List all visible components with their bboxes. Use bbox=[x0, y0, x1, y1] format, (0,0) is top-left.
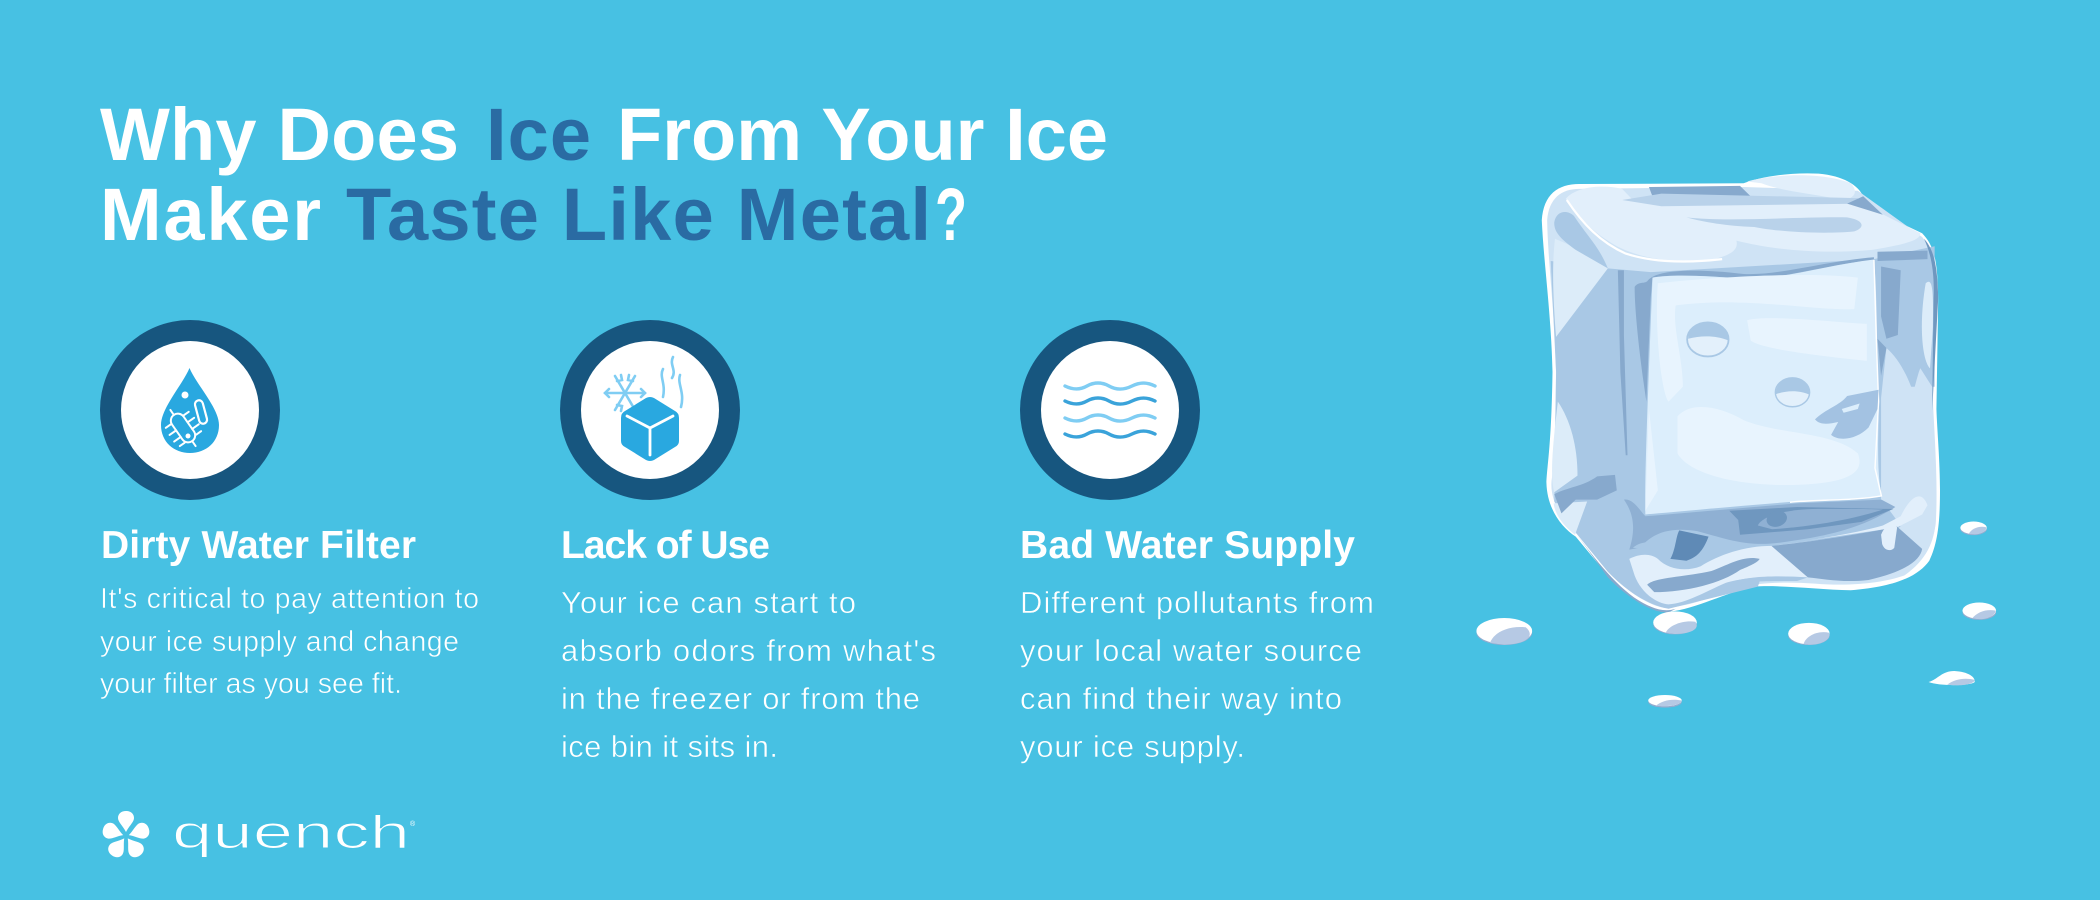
droplet 7 bbox=[1648, 695, 1682, 708]
text block: bad water supply bbox=[1020, 585, 1374, 764]
droplet 4 bbox=[1960, 521, 1987, 535]
title: Taste Like Metal bbox=[346, 173, 931, 256]
cube body bbox=[1547, 187, 1936, 608]
front face light blobs bbox=[1645, 275, 1867, 511]
left face shade bbox=[1551, 246, 1935, 609]
logo: quench bbox=[101, 806, 416, 860]
text block: dirty water filter: It's critical to pay attention to bbox=[100, 583, 479, 615]
text block: bad water supply: Different pollutants from bbox=[1020, 585, 1374, 620]
droplets bbox=[1476, 521, 1996, 708]
bottom drip bbox=[1881, 525, 1897, 550]
right highlight bbox=[1922, 282, 1933, 368]
bottom light zone bbox=[1629, 496, 1927, 604]
panel: dirty water filter bbox=[100, 320, 479, 700]
left highlights bbox=[1553, 239, 1608, 337]
text block: dirty water filter: your ice supply and change bbox=[100, 626, 459, 658]
title: Ice bbox=[486, 93, 591, 176]
illustration: melting ice cube bbox=[1476, 173, 1996, 708]
title: ? bbox=[935, 173, 967, 256]
top face bbox=[1566, 187, 1920, 261]
text block: lack of use: ice bin it sits in. bbox=[561, 729, 778, 764]
text block: lack of use: Your ice can start to bbox=[561, 585, 856, 620]
title: Why Does bbox=[100, 93, 459, 176]
front face bbox=[1645, 260, 1881, 514]
air bubble left bbox=[1687, 322, 1729, 356]
bottom right shade bbox=[1771, 527, 1922, 581]
dark spot bbox=[1670, 530, 1709, 561]
bottom dark streak bbox=[1647, 558, 1760, 592]
text block: lack of use: absorb odors from what's bbox=[561, 633, 936, 668]
panel: bad water supply bbox=[1020, 320, 1374, 764]
title bbox=[100, 93, 1108, 256]
cube silhouette bbox=[1542, 173, 1940, 612]
droplet 1 bbox=[1476, 618, 1532, 645]
icon: quench flower bbox=[101, 811, 151, 860]
text block: dirty water filter: your filter as you see fit. bbox=[100, 668, 402, 700]
heading: dirty water filter: Dirty Water Filter bbox=[101, 524, 416, 567]
bottom-left shadow edge bbox=[1577, 536, 1676, 613]
droplet 6 bbox=[1929, 671, 1975, 685]
title: From Your Ice bbox=[617, 93, 1108, 176]
text block: lack of use: in the freezer or from the bbox=[561, 681, 920, 716]
text block: bad water supply: can find their way into bbox=[1020, 681, 1342, 716]
registered mark: ® bbox=[410, 820, 416, 828]
text block: bad water supply: your ice supply. bbox=[1020, 729, 1245, 764]
front right edge highlight bbox=[1790, 260, 1881, 502]
icon: ice cube with snowflake and odor bbox=[560, 320, 740, 500]
droplet 2 bbox=[1653, 611, 1697, 634]
wordmark: quench bbox=[172, 806, 410, 858]
dark shades bbox=[1554, 186, 1938, 513]
panel: lack of use bbox=[560, 320, 936, 764]
text block: lack of use bbox=[561, 585, 936, 764]
top face edge highlight bbox=[1567, 200, 1722, 261]
icon: water drop with bacteria bbox=[100, 320, 280, 500]
bottom reflections bbox=[1624, 499, 1895, 550]
heading: lack of use: Lack of Use bbox=[561, 524, 770, 567]
top corner light bbox=[1747, 175, 1855, 200]
melt mark on front face bbox=[1815, 390, 1879, 439]
title: Maker bbox=[100, 173, 321, 256]
heading: bad water supply: Bad Water Supply bbox=[1020, 524, 1355, 567]
text block: dirty water filter bbox=[100, 583, 479, 700]
droplet 5 bbox=[1962, 603, 1996, 620]
air bubble right bbox=[1775, 378, 1810, 407]
right lower face bbox=[1881, 348, 1937, 561]
droplet 3 bbox=[1788, 623, 1830, 645]
icon: water waves bbox=[1020, 320, 1200, 500]
text block: bad water supply: your local water source bbox=[1020, 633, 1362, 668]
